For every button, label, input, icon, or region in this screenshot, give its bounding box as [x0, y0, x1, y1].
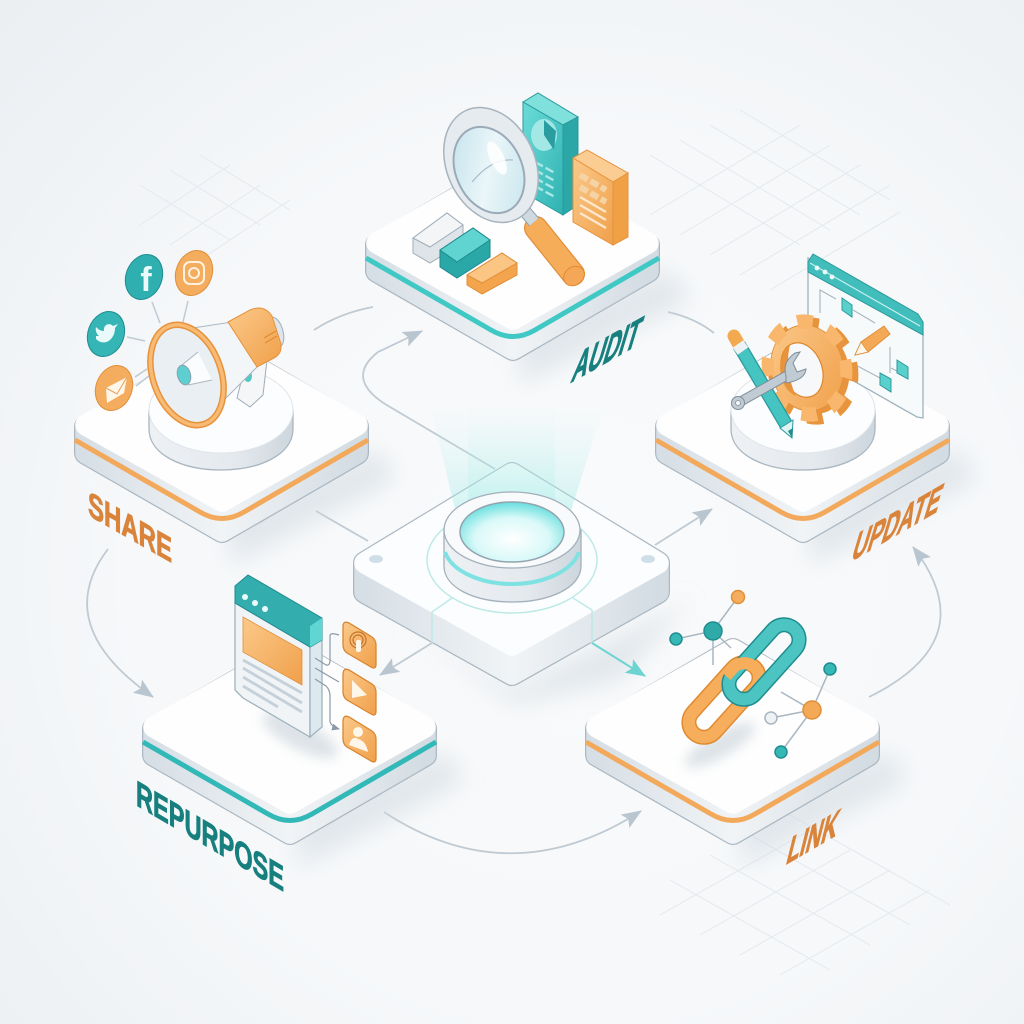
hub glowing disk — [460, 502, 564, 562]
icon: podcast tile — [343, 622, 376, 668]
platform shadow — [298, 752, 463, 867]
panel: center hub — [365, 400, 690, 705]
panel: audit — [366, 92, 690, 385]
icon: facebook badge — [119, 249, 169, 305]
connector: share to center — [316, 511, 368, 541]
icon: teal block — [440, 228, 490, 278]
hub base side — [365, 474, 658, 674]
pedestal — [731, 367, 875, 470]
teal link — [723, 619, 805, 705]
hub base top — [365, 474, 658, 645]
icon: connector arrows — [315, 634, 339, 729]
panel: repurpose — [143, 575, 463, 867]
label: audit: AUDIT — [567, 307, 648, 393]
platform stripe — [586, 742, 879, 820]
hub cylinder — [444, 492, 581, 602]
icon: orange block — [467, 253, 517, 294]
icon: grey block — [413, 213, 463, 263]
inner beam — [468, 400, 555, 530]
platform shadow — [741, 752, 906, 867]
arrow: audit to update — [668, 312, 714, 333]
arrow: center to update — [655, 509, 712, 545]
platform stripe — [366, 258, 659, 336]
label: link: LINK — [783, 800, 844, 874]
panel: share — [75, 245, 395, 565]
platform — [377, 166, 648, 349]
hub ring and seams — [427, 507, 597, 643]
orange link — [683, 657, 765, 743]
icon: video tile — [343, 669, 376, 715]
platform shadow — [520, 270, 690, 385]
icon: mail badge — [89, 360, 139, 416]
arrow: center to audit — [363, 331, 495, 469]
icon: twitter badge — [81, 306, 131, 362]
icon: profile tile — [343, 716, 376, 762]
label: repurpose: REPURPOSE — [136, 774, 284, 900]
icon: wrench — [732, 352, 806, 410]
megaphone mouth — [137, 315, 237, 435]
icon: document page — [235, 575, 322, 737]
platform shadow — [810, 450, 975, 565]
document shadow — [256, 703, 344, 767]
panel: link — [586, 590, 906, 867]
icon: small pencil — [855, 326, 890, 355]
arrow: center to repurpose — [380, 643, 432, 675]
arrow: share to audit — [314, 307, 373, 330]
megaphone handle — [237, 360, 267, 407]
rim — [426, 92, 556, 238]
icon: chain links — [683, 619, 805, 743]
hub shadow — [400, 600, 690, 705]
chain shadow — [679, 715, 761, 775]
icon: report tower — [523, 93, 578, 215]
mounting dots — [369, 555, 655, 563]
platform stripe — [75, 440, 368, 518]
handle — [536, 228, 573, 274]
neck — [518, 203, 534, 222]
platform — [154, 650, 425, 833]
arrow: update to link — [869, 547, 941, 697]
arrow: repurpose to link — [384, 811, 641, 853]
teal output arrow — [592, 643, 645, 676]
icon: pencil — [734, 336, 793, 438]
megaphone band — [228, 308, 281, 367]
pedestal — [149, 367, 293, 470]
panel: update — [656, 254, 975, 565]
megaphone body — [186, 322, 258, 402]
icon: orange document — [573, 150, 628, 245]
platform shadow — [230, 450, 395, 565]
arrow: share to repurpose — [87, 549, 153, 697]
megaphone rear cap — [265, 316, 287, 348]
icon: gear — [759, 314, 861, 425]
platform stripe — [656, 440, 949, 518]
icon: facebook badge: f — [140, 261, 152, 299]
icon: browser window — [808, 254, 923, 418]
flow arrows — [87, 307, 941, 853]
platform — [86, 348, 357, 531]
platform — [597, 650, 868, 833]
megaphone tube — [182, 352, 212, 385]
light beam — [430, 405, 604, 530]
platform — [667, 348, 938, 531]
icon: magnifying glass — [426, 92, 588, 290]
icon: social connector lines — [127, 301, 188, 386]
platform stripe — [143, 742, 436, 820]
icon: instagram badge — [169, 245, 219, 301]
label: share: SHARE — [88, 483, 172, 570]
orange overlap — [726, 663, 754, 676]
icon: megaphone — [137, 308, 287, 435]
icon: network graph — [670, 590, 836, 758]
